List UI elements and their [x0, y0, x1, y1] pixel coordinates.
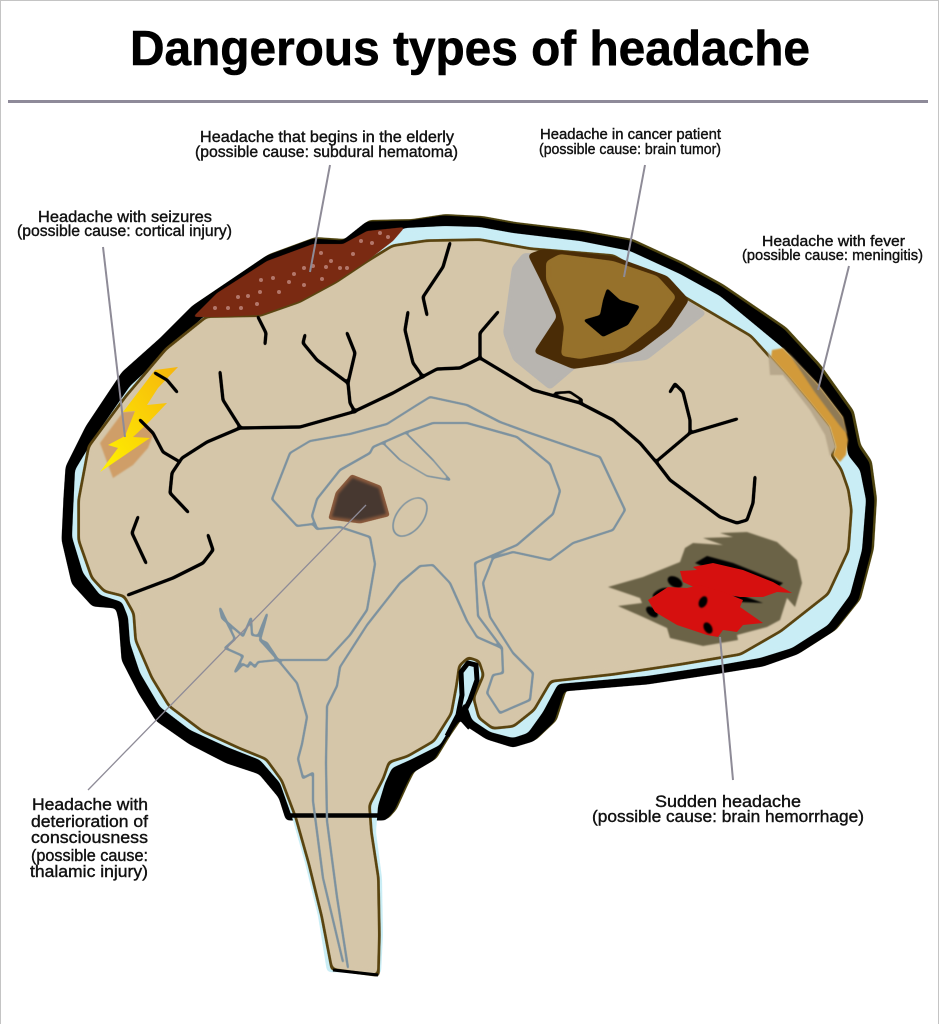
tumor capsule — [529, 250, 688, 368]
tumor body — [547, 255, 675, 358]
spiky pineal outline — [220, 608, 278, 672]
label: subdural hematoma — [195, 129, 458, 161]
label: subdural hematoma: Headache that begins in the elderly — [200, 129, 454, 146]
central clots — [697, 595, 714, 635]
brainstem contours — [326, 565, 502, 968]
fold loop black line — [447, 663, 477, 736]
brain illustration — [63, 216, 876, 975]
pointer line: subdural hematoma — [310, 165, 330, 272]
cortical injury patch — [100, 411, 153, 478]
label: brain hemorrhage: Sudden headache — [655, 792, 801, 811]
thalamic lesion — [330, 476, 388, 522]
label: thalamic injury: deterioration of — [31, 812, 148, 831]
seizure lightning icon — [100, 367, 178, 478]
pointer line: thalamic injury — [88, 505, 366, 790]
pointer line: hemorrhage — [720, 637, 733, 780]
label: brain tumor — [539, 126, 722, 158]
pointer line: meningitis — [818, 266, 849, 390]
brain tissue outline — [80, 241, 850, 974]
corpus callosum outer — [260, 397, 625, 713]
brain hemorrhage — [608, 532, 802, 646]
dark clot patches — [644, 574, 763, 620]
necrotic core — [583, 288, 640, 337]
darker outer streak — [788, 352, 847, 434]
label: subdural hematoma: (possible cause: subdural hematoma) — [195, 144, 458, 161]
fornix — [383, 434, 450, 480]
hematoma body — [193, 227, 405, 317]
pointer line: seizures — [103, 247, 125, 437]
pointer line: brain tumor — [624, 165, 645, 277]
label: thalamic injury — [30, 795, 148, 881]
red blood lower lobe — [648, 585, 763, 637]
skull black outline — [63, 217, 873, 819]
sulci above bolt — [140, 373, 180, 462]
surrounding edema — [608, 532, 802, 646]
label: brain hemorrhage — [592, 792, 864, 826]
label: thalamic injury: (possible cause: — [31, 846, 148, 865]
label: meningitis: Headache with fever — [762, 233, 905, 250]
skull outer shadow — [66, 216, 876, 818]
label: brain tumor: (possible cause: brain tumor) — [539, 141, 721, 158]
inflamed shading — [768, 350, 836, 456]
brain tissue — [80, 241, 850, 974]
label: seizures: (possible cause: cortical injury) — [17, 223, 232, 240]
label: seizures: Headache with seizures — [38, 209, 212, 226]
cerebellar contour — [278, 660, 343, 962]
label: meningitis: (possible cause: meningitis) — [742, 247, 923, 264]
brain tumor — [503, 250, 707, 390]
label: brain hemorrhage: (possible cause: brain hemorrhage) — [592, 807, 864, 826]
lightning bolt — [100, 367, 178, 472]
meningitis patch — [768, 348, 848, 462]
oval nucleus — [386, 492, 434, 542]
inflamed meninges — [771, 348, 848, 462]
hematoma speckles — [213, 231, 390, 310]
label: thalamic injury: Headache with — [32, 795, 148, 814]
sulci of the cortex — [128, 243, 755, 595]
label: meningitis — [742, 233, 923, 264]
label: thalamic injury: thalamic injury) — [30, 862, 148, 881]
label: thalamic injury: consciousness — [31, 828, 148, 847]
brainstem base line — [333, 970, 378, 975]
dark clot rim — [695, 556, 783, 588]
red blood upper lobe — [680, 563, 792, 597]
subdural hematoma — [193, 227, 405, 317]
label: brain tumor: Headache in cancer patient — [540, 126, 722, 143]
edema halo — [503, 253, 707, 390]
inner brain structures — [220, 397, 625, 968]
meningeal fluid layer — [72, 226, 866, 974]
brainstem neck line — [287, 813, 385, 818]
title: Dangerous types of headache — [130, 22, 810, 76]
label: seizures — [17, 209, 232, 240]
